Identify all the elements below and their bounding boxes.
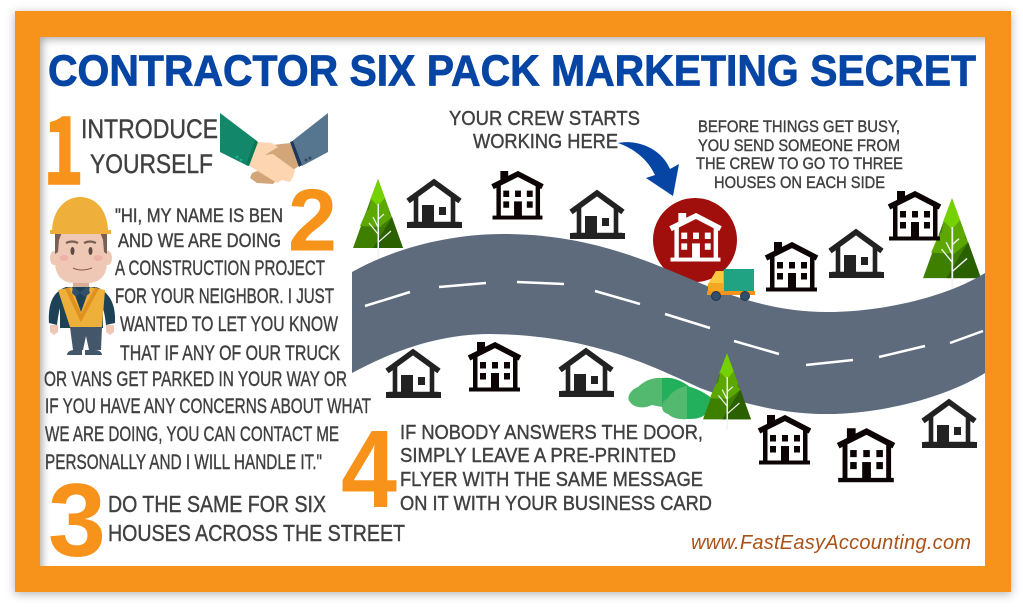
- step 2 quote: THAT IF ANY OF OUR TRUCK: [120, 342, 340, 365]
- crew callout text: YOUR CREW STARTS: [449, 108, 640, 130]
- step 2 quote: IF YOU HAVE ANY CONCERNS ABOUT WHAT: [45, 395, 371, 418]
- step 1 number: 1: [43, 76, 84, 211]
- before things get busy text: YOU SEND SOMEONE FROM: [698, 137, 900, 155]
- step 3 number: 3: [48, 463, 106, 579]
- houses: upper row left: [407, 171, 625, 239]
- step 2 quote: "HI, MY NAME IS BEN: [115, 206, 283, 227]
- start house: red circle: [653, 198, 737, 282]
- step 2 quote: WE ARE DOING, YOU CAN CONTACT ME: [45, 423, 339, 446]
- before things get busy text: [696, 118, 903, 192]
- step 2 number: 2: [288, 170, 337, 270]
- step 4 number: 4: [341, 408, 397, 531]
- website url: www.FastEasyAccounting.com: [691, 532, 971, 554]
- tree: left: [353, 179, 403, 259]
- step 4 text: SIMPLY LEAVE A PRE-PRINTED: [400, 445, 676, 467]
- truck: [707, 269, 755, 300]
- arrow: to start house: [618, 142, 679, 196]
- step 4 text: IF NOBODY ANSWERS THE DOOR,: [400, 422, 703, 444]
- step 3 text: HOUSES ACROSS THE STREET: [108, 520, 405, 546]
- step 1 heading: YOURSELF: [90, 149, 213, 179]
- step 2 quote: FOR YOUR NEIGHBOR. I JUST: [115, 285, 334, 308]
- before things get busy text: HOUSES ON EACH SIDE: [714, 174, 885, 192]
- step 2 quote: AND WE ARE DOING: [118, 231, 281, 252]
- step 1 heading: INTRODUCE: [81, 114, 218, 144]
- crew callout text: [449, 108, 640, 153]
- step 2 quote: OR VANS GET PARKED IN YOUR WAY OR: [44, 368, 347, 391]
- step 2 quote: A CONSTRUCTION PROJECT: [115, 257, 325, 280]
- before things get busy text: THE CREW TO GO TO THREE: [696, 155, 903, 173]
- step 2 quote: WANTED TO LET YOU KNOW: [120, 313, 338, 336]
- step 4 text: ON IT WITH YOUR BUSINESS CARD: [400, 493, 712, 515]
- step 2 quote: PERSONALLY AND I WILL HANDLE IT.": [45, 451, 322, 474]
- before things get busy text: BEFORE THINGS GET BUSY,: [698, 118, 900, 136]
- step 3 text: DO THE SAME FOR SIX: [108, 491, 326, 517]
- step 4 text: FLYER WITH THE SAME MESSAGE: [400, 469, 703, 491]
- houses: lower row right: [759, 402, 977, 482]
- step 4 text: [400, 422, 712, 515]
- bush: [628, 378, 712, 419]
- houses: lower row left: [386, 342, 614, 398]
- step 2 quote: [44, 206, 371, 474]
- character: construction worker: [49, 197, 115, 355]
- crew callout text: WORKING HERE: [473, 131, 618, 153]
- tree: middle: [703, 353, 751, 430]
- tree: right: [923, 198, 981, 291]
- step 3 text: [108, 491, 405, 546]
- step 1 heading: [81, 114, 218, 179]
- houses: upper row right: [766, 191, 940, 292]
- road: [352, 234, 985, 414]
- title: CONTRACTOR SIX PACK MARKETING SECRET: [48, 46, 976, 96]
- icon: handshake: [220, 113, 328, 184]
